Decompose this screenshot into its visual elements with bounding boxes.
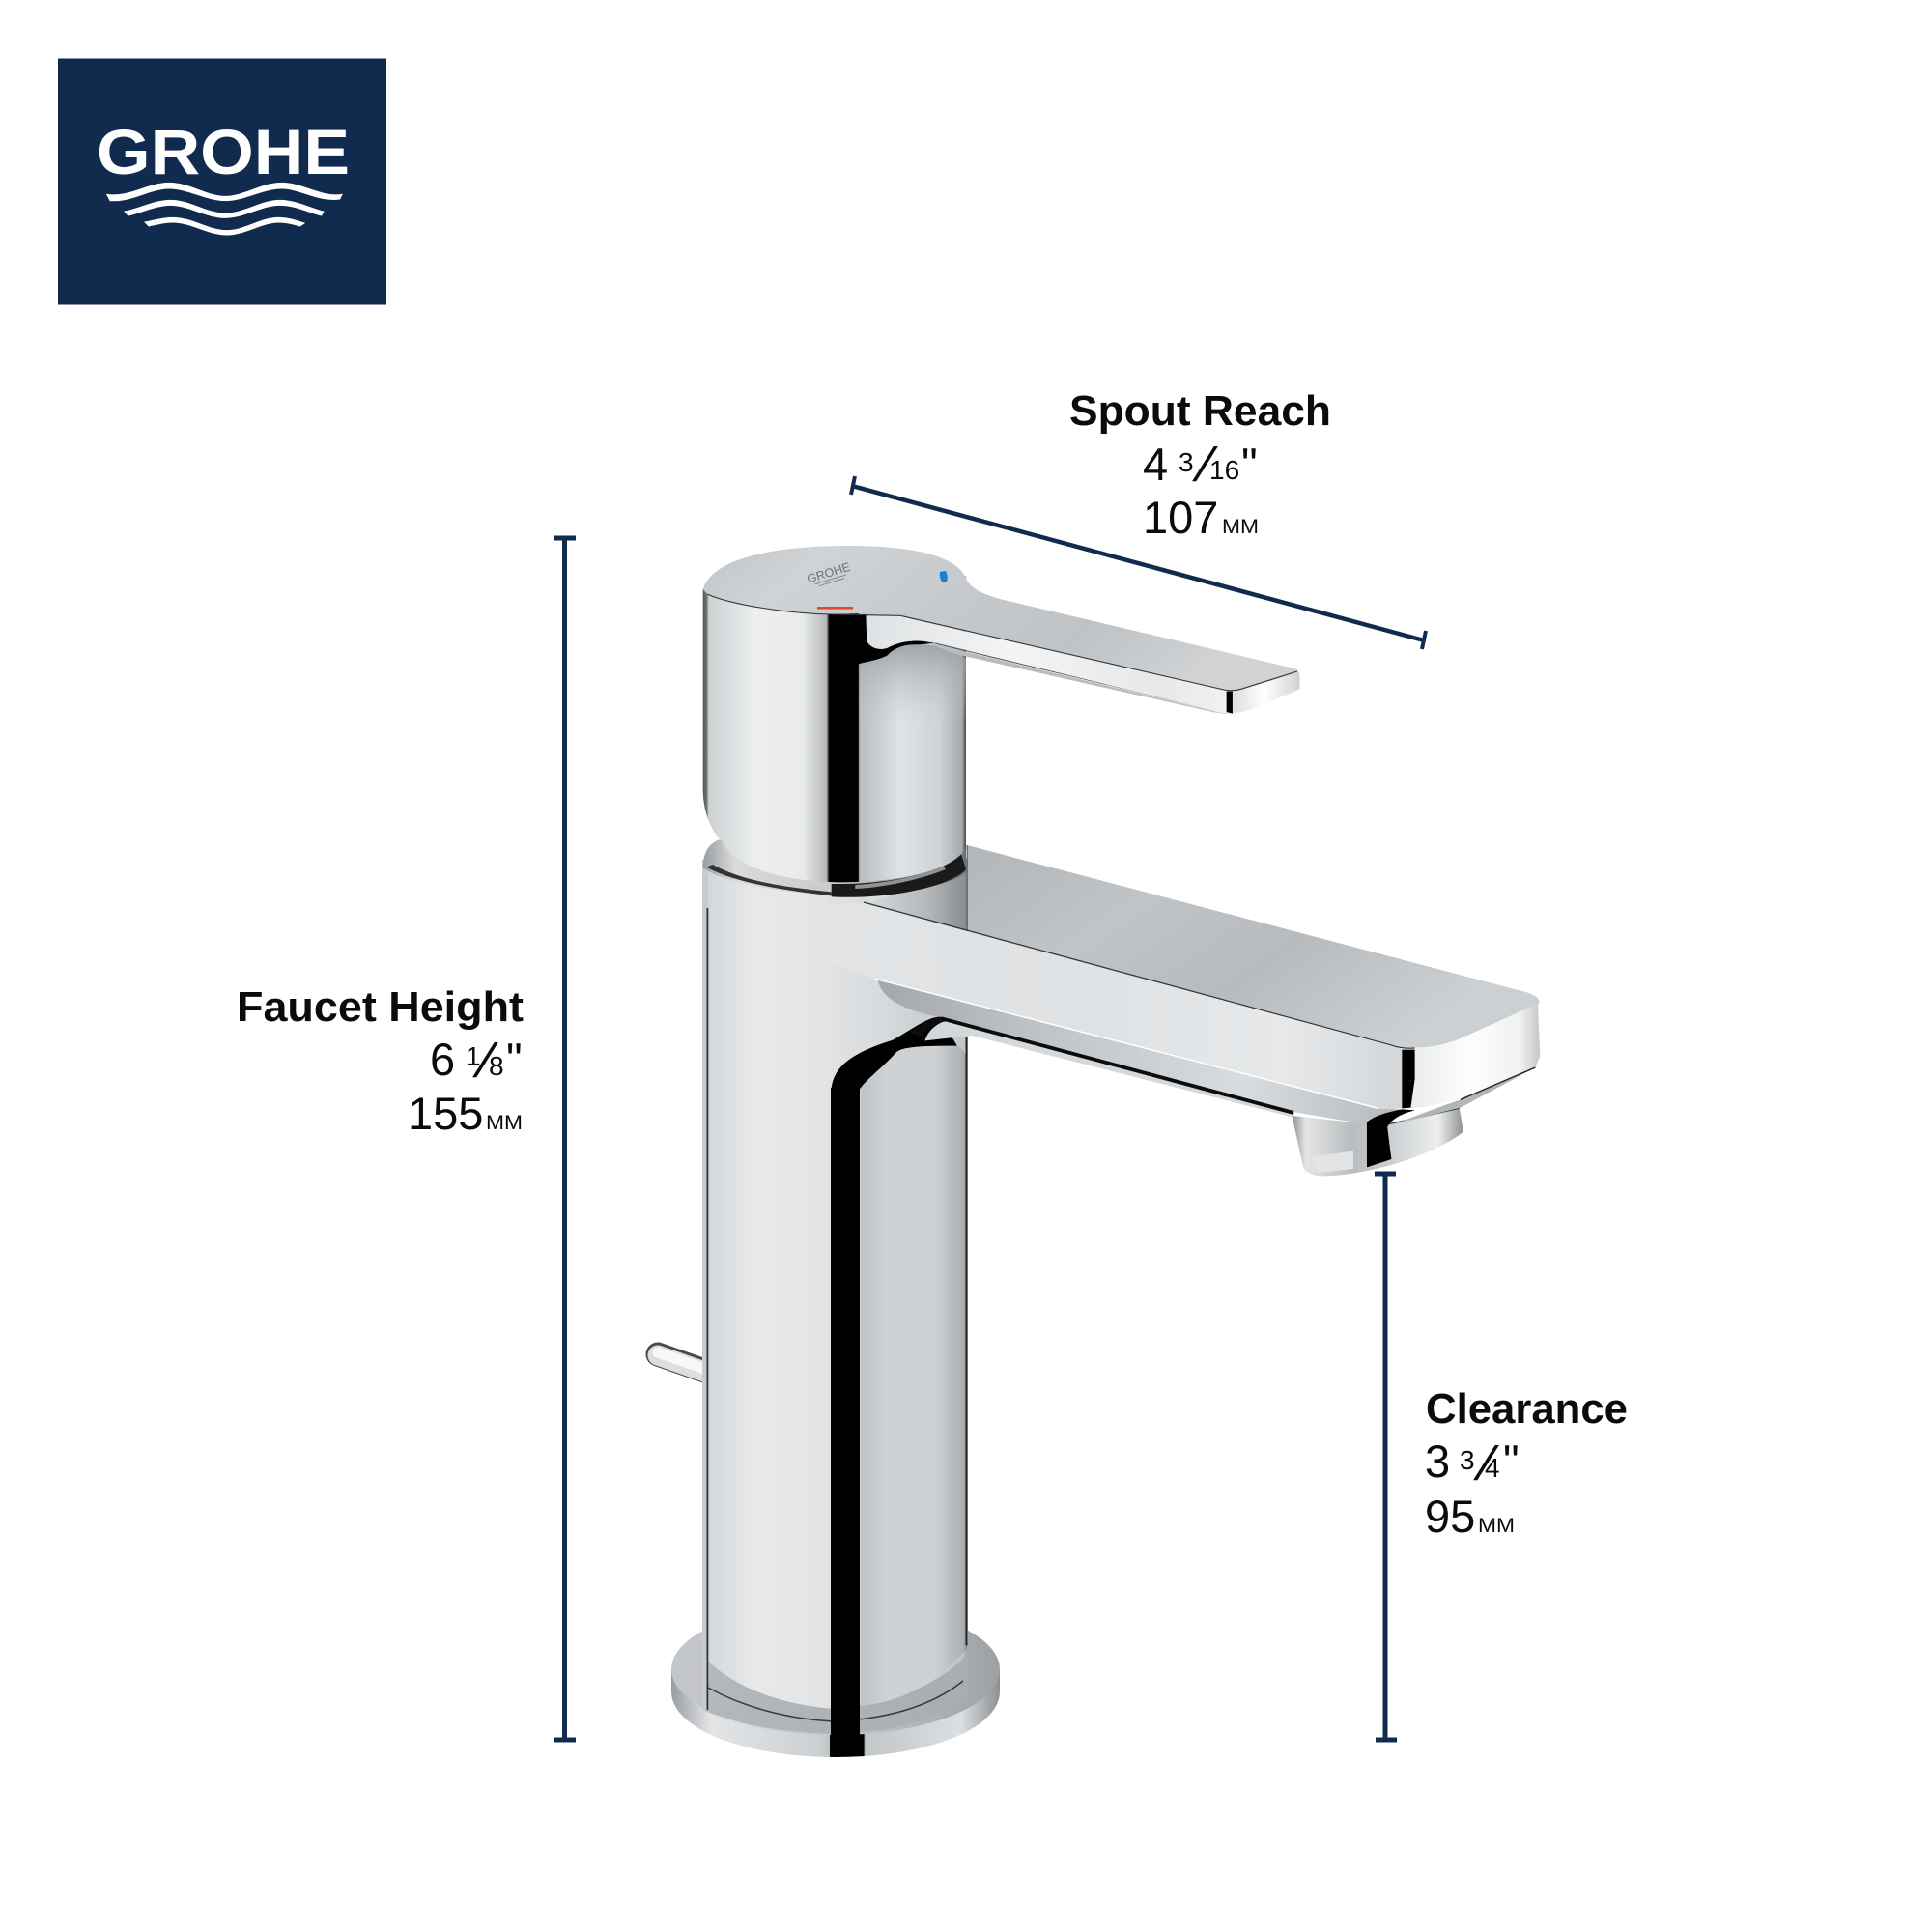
label: clearance: 3 — [1425, 1435, 1450, 1487]
label: spout reach: 107 — [1143, 492, 1218, 543]
spout front face — [822, 903, 1402, 1109]
label: clearance: 95 — [1425, 1491, 1475, 1542]
dimension line: faucet height — [554, 537, 576, 1740]
label: faucet height: Faucet Height — [237, 984, 524, 1031]
handle body — [703, 577, 966, 882]
label: clearance: ⁄ — [1473, 1435, 1499, 1492]
label: spout reach: Spout Reach — [1069, 388, 1331, 435]
label: faucet height: 155 — [408, 1088, 483, 1139]
label: faucet height — [237, 984, 524, 1139]
stem right panel — [861, 1046, 967, 1706]
black reflection — [832, 614, 935, 693]
label: spout reach: " — [1241, 439, 1258, 490]
hot marker — [817, 607, 853, 610]
label: faucet height: 1 — [466, 1041, 481, 1071]
spout underside — [878, 980, 1402, 1124]
handle and lever — [703, 546, 1300, 897]
lever tip — [1228, 671, 1300, 714]
base plate — [671, 1604, 1000, 1757]
label: clearance: 4 — [1485, 1453, 1500, 1483]
label: clearance: MM — [1478, 1515, 1515, 1537]
cap emblem: GROHE — [806, 560, 852, 586]
dimension line: spout reach — [851, 476, 1426, 649]
lever front — [866, 614, 1228, 713]
label: clearance: Clearance — [1426, 1386, 1628, 1433]
neck — [869, 858, 967, 932]
GROHE logo: GROHE — [97, 116, 350, 187]
label: clearance — [1425, 1386, 1628, 1542]
label: spout reach — [1069, 388, 1331, 543]
GROHE logo — [58, 58, 386, 305]
label: faucet height: 8 — [489, 1051, 504, 1081]
spout — [822, 845, 1540, 1706]
label: faucet height: " — [506, 1034, 523, 1085]
spout top face — [967, 845, 1540, 1048]
label: faucet height: 6 — [430, 1034, 455, 1085]
logo waves — [107, 183, 342, 235]
aerator — [1292, 1108, 1463, 1176]
label: faucet height: ⁄ — [472, 1033, 498, 1089]
faucet stem — [702, 860, 968, 1735]
label: spout reach: MM — [1222, 516, 1259, 538]
collar dish — [703, 838, 966, 895]
label: spout reach: 16 — [1209, 455, 1239, 485]
dimension line: clearance — [1375, 1173, 1397, 1740]
pop-up drain rod — [658, 1352, 710, 1374]
label: spout reach: ⁄ — [1192, 437, 1218, 493]
lever underside — [926, 642, 1226, 714]
label: clearance: " — [1503, 1435, 1520, 1487]
cold marker — [940, 571, 948, 582]
label: clearance: 3 — [1460, 1445, 1475, 1475]
label: faucet height: MM — [486, 1112, 523, 1134]
faucet illustration — [658, 546, 1540, 1757]
label: spout reach: 3 — [1179, 447, 1194, 477]
label: spout reach: 4 — [1143, 439, 1168, 490]
spout end face — [1405, 1003, 1540, 1108]
cap and lever top surface — [703, 546, 1299, 691]
